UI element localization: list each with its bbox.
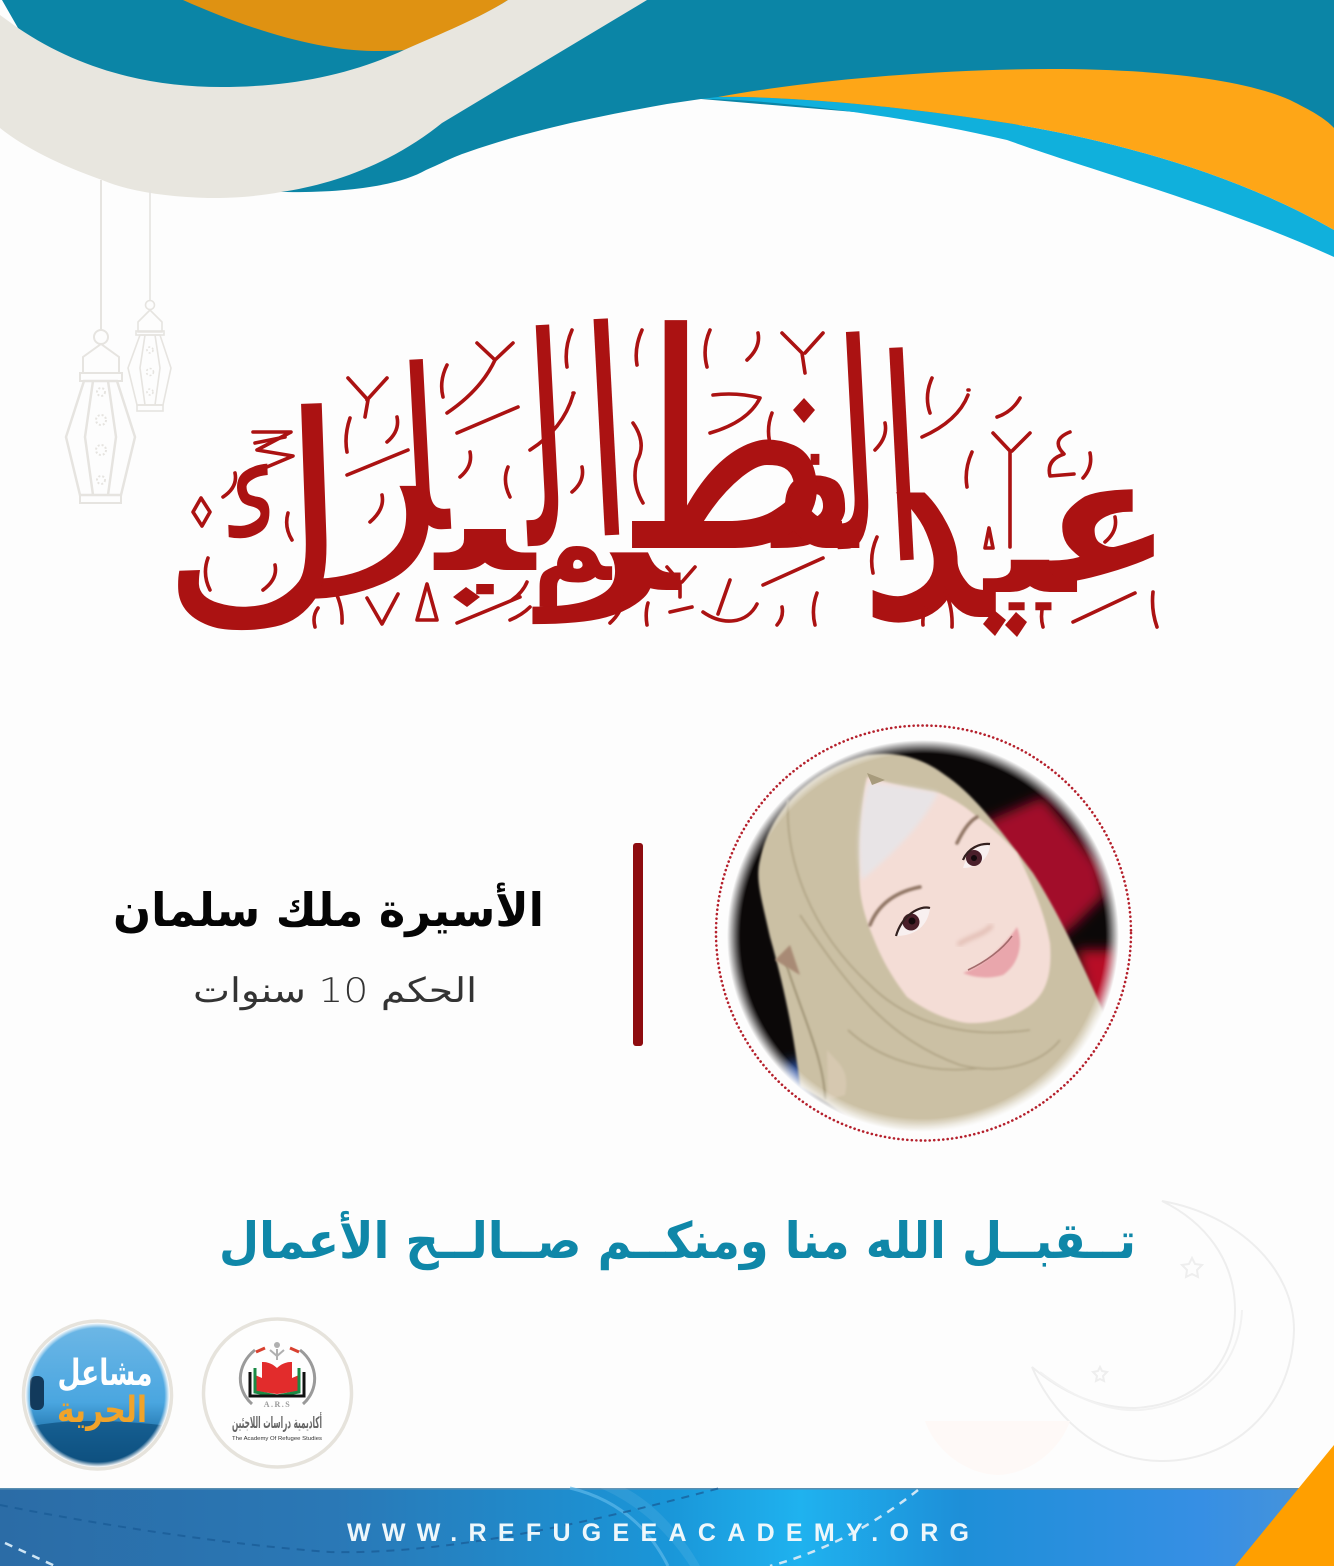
star — [1182, 1258, 1202, 1277]
title calligraphy: Eid al-Fitr al-Mubarak: ‍ط‍ — [631, 271, 845, 620]
scarf folds — [785, 800, 1060, 1100]
decorative tashkeel ornaments around the calligraphy — [193, 330, 1157, 627]
logo: Academy of Refugee Studies: The Academy Of Refugee Studies — [232, 1436, 322, 1442]
portrait: dotted ring — [716, 726, 1131, 1140]
title calligraphy: Eid al-Fitr al-Mubarak: ل‍ — [513, 277, 578, 615]
website url: WWW.REFUGEEACADEMY.ORG — [347, 1519, 969, 1547]
top wave: light blue strip — [701, 97, 1334, 257]
title calligraphy: Eid al-Fitr al-Mubarak: ع‍ — [1041, 416, 1173, 626]
logo: Torches of Freedom: مشاعل — [58, 1353, 152, 1394]
title calligraphy: Eid al-Fitr al-Mubarak: ‍ب‍ — [434, 441, 537, 603]
footer orange corner — [1235, 1445, 1334, 1566]
open book — [250, 1362, 304, 1396]
title calligraphy: Eid al-Fitr al-Mubarak: ‍ف‍ — [770, 410, 860, 584]
title calligraphy: Eid al-Fitr al-Mubarak: ل‍ — [823, 283, 888, 617]
greeting: تــقبــل الله منا ومنكــم صــالــح الأعمال — [219, 1210, 1136, 1271]
title calligraphy: Eid al-Fitr al-Mubarak: ‍ا — [393, 322, 455, 585]
title calligraphy: Eid al-Fitr al-Mubarak: ‍ر — [532, 461, 681, 624]
eyebrows — [870, 817, 977, 925]
face — [860, 777, 1050, 1023]
scarf point — [867, 773, 885, 785]
title calligraphy: Eid al-Fitr al-Mubarak: ا — [873, 300, 931, 627]
ornament: diamond dots — [453, 398, 1027, 637]
title calligraphy: Eid al-Fitr al-Mubarak: ‍م — [533, 477, 613, 607]
title calligraphy: Eid al-Fitr al-Mubarak: ر — [308, 340, 445, 599]
top wave: teal band — [2, 0, 1334, 192]
logo: Torches of Freedom — [20, 1320, 175, 1470]
lanterns — [66, 180, 171, 503]
top wave: cream ribbon — [0, 0, 647, 198]
figure — [274, 1342, 280, 1348]
title calligraphy: Eid al-Fitr al-Mubarak — [154, 269, 1173, 693]
title calligraphy: Eid al-Fitr al-Mubarak: ا — [576, 269, 638, 604]
title calligraphy: Eid al-Fitr al-Mubarak: ‍د — [857, 339, 999, 689]
logo: Academy of Refugee Studies — [204, 1319, 352, 1467]
top wave: orange — [718, 69, 1334, 230]
logo: Torches of Freedom: الحرية — [57, 1390, 147, 1431]
portrait photo — [720, 730, 1126, 1146]
logo: Academy of Refugee Studies: أكاديمية دراسات اللاجئين — [232, 1412, 322, 1432]
mouth — [963, 927, 1020, 977]
large lantern — [66, 180, 135, 503]
footer bar — [0, 1445, 1334, 1566]
forehead highlight — [859, 782, 938, 880]
title calligraphy: Eid al-Fitr al-Mubarak: ‍ي‍ — [983, 491, 1077, 619]
small lantern — [128, 190, 171, 411]
top wave: dark orange — [183, 0, 508, 51]
nose shade — [958, 925, 992, 945]
scarf — [758, 754, 1105, 1143]
eyes — [896, 844, 990, 936]
laurel arcs — [240, 1350, 315, 1404]
logo: Academy of Refugee Studies: A.R.S — [264, 1400, 291, 1409]
title calligraphy: Eid al-Fitr al-Mubarak: ك — [154, 356, 355, 693]
divider bar — [633, 843, 643, 1046]
crescent with stars — [1032, 1201, 1294, 1461]
faint pink half disk — [925, 1421, 1070, 1475]
star — [1093, 1367, 1107, 1381]
sentence: الحكم 10 سنوات — [193, 971, 477, 1011]
lower right fade — [960, 1111, 999, 1124]
hand shadow — [775, 945, 800, 975]
prisoner name: الأسيرة ملك سلمان — [113, 882, 544, 937]
